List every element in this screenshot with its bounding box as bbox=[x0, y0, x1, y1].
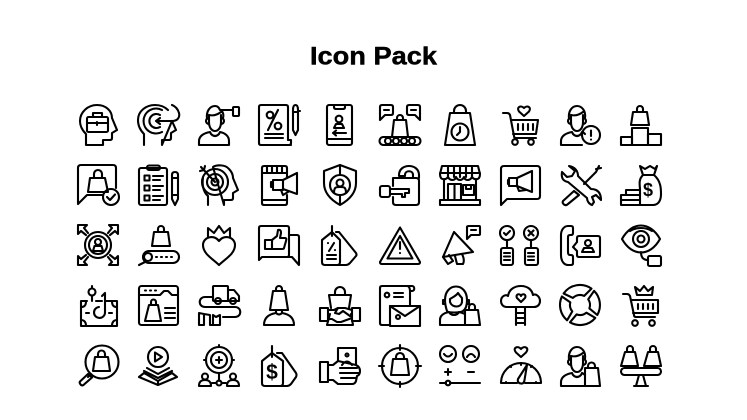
icon: woman with headset and bag bbox=[440, 286, 480, 325]
icon: magnifier with bag bbox=[80, 346, 118, 385]
icon: phone with megaphone bbox=[262, 166, 297, 205]
icon: cloud with heart and ladder bbox=[501, 286, 540, 325]
icon: money bag with coins: $ bbox=[643, 180, 653, 200]
icon: crosshair with bag bbox=[379, 345, 421, 387]
icon: clipboard checklist with pencil bbox=[139, 166, 178, 205]
icon: telephone with contact card bbox=[561, 226, 600, 265]
icon: person with headset and key bbox=[199, 106, 239, 145]
icon: head with target and arrow bbox=[200, 165, 238, 205]
icon: person with alert badge bbox=[561, 106, 600, 145]
icon: heart with crown bbox=[203, 226, 235, 265]
icon: percent document with pencil bbox=[259, 105, 300, 145]
icon: store front bbox=[440, 166, 480, 205]
icon: thumbs up speech bubbles bbox=[259, 226, 299, 265]
icon: conveyor bag with speech bubbles bbox=[380, 105, 420, 145]
icon: phone with contact bbox=[327, 105, 352, 145]
icon: segmented lifebuoy bbox=[560, 285, 600, 325]
icon: head with briefcase bbox=[80, 105, 117, 145]
icon: bag with handshake bbox=[320, 287, 360, 325]
icon: speech bubble with megaphone bbox=[501, 166, 540, 205]
icon: gauge with heart bbox=[501, 347, 541, 384]
icon: head with arrow target bbox=[138, 105, 179, 145]
icon: dollar price tags bbox=[262, 346, 296, 386]
icon: money with fishing hook bbox=[81, 286, 117, 326]
icon: shopping cart with heart bbox=[503, 107, 538, 145]
title: Icon Pack bbox=[310, 42, 437, 70]
icon: target with people bbox=[199, 345, 239, 386]
icon: bag on podium bbox=[621, 106, 661, 145]
icon: delivery truck route to warehouse bbox=[199, 286, 240, 325]
icon: person with shopping bag bbox=[561, 347, 600, 386]
icon: circle person with corner arrows bbox=[78, 225, 118, 265]
icon: approve and reject checklists bbox=[500, 226, 538, 265]
icon: person with bag on head bbox=[264, 286, 294, 325]
icon: bag with clock bbox=[445, 105, 475, 145]
icon: satisfaction faces and slider bbox=[440, 346, 480, 385]
icon: eye with tag bbox=[622, 226, 661, 266]
icon: bag on conveyor bbox=[139, 226, 179, 265]
icon: warning triangle bbox=[380, 228, 420, 264]
icon: megaphone with speech bubble bbox=[443, 226, 480, 264]
icon: book with play button bbox=[139, 347, 177, 385]
icon: balance scale with bags bbox=[621, 346, 661, 386]
icon: shopping cart with crown bbox=[623, 286, 658, 326]
icon: open lock with key bbox=[380, 166, 419, 205]
icon: percent tags bbox=[322, 226, 356, 265]
icon: browser with shopping bag bbox=[139, 286, 178, 325]
icon: shield with person bbox=[324, 165, 356, 205]
icon: speech bubble with bag and check bbox=[78, 165, 119, 205]
icon: document with envelope bbox=[380, 286, 420, 326]
icon: money bag with coins bbox=[621, 166, 661, 205]
icon: crossed wrench and screwdriver bbox=[562, 166, 601, 205]
icon: hand holding card bbox=[320, 348, 360, 384]
icon: dollar price tags: $ bbox=[266, 361, 278, 384]
